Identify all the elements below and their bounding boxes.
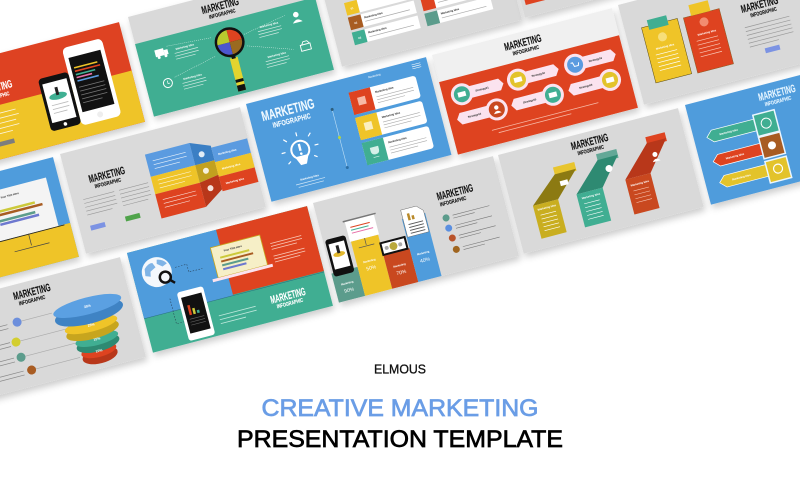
heading: marketing infographic: MARKETING [269,286,307,307]
card: red [681,0,734,73]
step: yellow: Marketing Idea [537,203,557,212]
chart: presentation board [0,176,68,256]
folded table: Marketing Idea [218,147,237,156]
bar: 40 percent [402,213,442,282]
card: red idea: Marketing Idea [375,85,394,94]
list rows: Marketing Idea [368,26,387,34]
heading: marketing infographic: MARKETING [503,33,543,54]
step: teal [568,149,633,227]
folded table: Marketing Idea [225,176,245,185]
chart: stacked funnel [51,289,136,372]
title: creative marketing: CREATIVE MARKETING [262,395,538,422]
icon: document [401,205,429,237]
heading: marketing infographic: INFOGRAPHIC [276,298,304,310]
icon: phone with bars [177,286,215,341]
arrow: red: Marketing Idea [725,152,745,160]
pill: strategy 06 [566,67,623,101]
heading: marketing infographic: MARKETING [570,132,610,153]
heading: marketing infographic [570,132,611,158]
icon: phone [325,235,355,277]
pill: strategy 01 [448,73,506,108]
text: brand name: ELMOUS [374,362,426,376]
step: teal: Marketing Idea [581,191,601,200]
panel: gray slide with red band [499,0,705,18]
panel: gray numbered list slide [316,0,522,67]
panel: blue arrows slide [685,58,800,205]
card: red: Marketing Idea [697,28,717,37]
folded table: Marketing Idea [221,162,241,171]
panel: globe laptop phone slide [127,206,333,353]
icon: laptop with bar chart [205,234,273,282]
card: teal idea: Marketing Idea [388,136,407,144]
pill: strategy 02: Strategy02 [531,71,546,78]
pill: strategy 05 [509,81,566,116]
panel: red strategy pills slide [432,8,638,155]
bar: 50 percent: Marketing [363,257,376,264]
bar: 50 percent: 50% [366,264,378,273]
timeline [330,108,349,169]
list rows: Marketing Idea [364,11,383,19]
chart: stacked funnel: 15% [93,336,102,342]
pill: strategy 01: Strategy01 [475,85,490,93]
icon: large white phone [62,38,122,126]
heading: marketing infographic [0,78,15,105]
text: idea labels: Marketing Idea [267,50,287,59]
icon: globe with magnifier [138,254,175,290]
heading: marketing infographic [269,286,308,311]
list rows: 03 [358,35,362,40]
icon: laptop with bar chart: Your Title Here [223,244,243,253]
arrow: red [710,132,785,171]
step: red [616,132,683,215]
icon: laptop [379,236,409,256]
panel: gray cards slide [618,0,800,105]
button [0,138,15,148]
icon: light bulb [277,128,322,169]
icon: car [299,40,311,51]
legend markers [6,316,37,378]
pill: strategy 06: Strategy06 [579,82,593,90]
bar: 70 percent: Marketing [393,262,406,269]
panel: gray folded table slide [60,107,266,254]
pill: strategy 05: Strategy05 [522,97,537,105]
bar: 40 percent: 40% [420,256,431,265]
chart: stacked funnel: 10% [95,348,104,354]
bar: 40 percent: Marketing [416,249,430,256]
arrow: yellow [717,156,792,195]
bar: 50 percent [351,235,392,296]
pill: strategy 04: Strategy04 [467,111,482,119]
list rows [344,0,493,45]
icon: clock [162,78,173,89]
bar: 90 percent: Marketing [341,279,354,286]
icon: truck [154,47,169,60]
panel: blue bulb slide [246,57,451,202]
heading: marketing infographic: INFOGRAPHIC [750,7,778,19]
legend [442,203,501,254]
text: idea labels: Marketing Idea [259,20,279,29]
step: red: Marketing Idea [630,179,650,188]
pill: strategy 03 [562,44,618,78]
list rows: Marketing Idea [440,7,460,15]
text: idea labels: Marketing Idea [183,72,203,81]
arrow: teal [704,110,780,149]
heading: marketing infographic: MARKETING [260,95,316,124]
bar: 90 percent: 90% [344,286,355,295]
card: yellow idea [355,101,428,140]
card: teal idea [362,126,434,165]
pill: strategy 04 [454,96,510,130]
text: top nav: Marketing [368,72,381,79]
bar: 70 percent [383,248,418,289]
heading: marketing infographic [436,182,476,209]
heading: marketing infographic: INFOGRAPHIC [439,196,467,208]
icon: small black phone [38,72,81,132]
heading: marketing infographic: MARKETING [12,282,52,303]
step: yellow [525,162,591,239]
icon: person [290,11,303,24]
list rows: 02 [354,20,358,25]
arrow: yellow: Marketing Idea [732,173,752,181]
chart: stacked funnel: 35% [83,303,92,309]
folded table [145,129,261,218]
chart: magnifier with pie [211,24,257,94]
panel: gray 3d steps slide [498,108,704,254]
panel: blue and yellow chart slide [0,157,79,304]
text: idea labels: Marketing Idea [175,42,195,51]
card: red idea [348,75,421,115]
arrow: teal: Marketing Idea [719,127,739,136]
panel: gray bars slide [313,156,519,303]
panel: gray funnel slide [0,257,146,404]
heading: marketing infographic: INFOGRAPHIC [94,178,122,190]
bar: 70 percent: 70% [396,269,408,277]
text: idea labels [175,20,287,81]
title: presentation template: PRESENTATION TEMPLATE [237,426,563,453]
heading: marketing infographic: INFOGRAPHIC [18,295,46,307]
card: yellow [640,13,692,83]
heading: marketing infographic: MARKETING [87,165,126,186]
heading: marketing infographic [503,33,544,59]
card: yellow idea: Marketing Idea [381,110,401,119]
heading: marketing infographic [200,0,242,22]
heading: marketing infographic [757,83,798,109]
button [90,222,106,231]
heading: marketing infographic: INFOGRAPHIC [512,45,540,57]
panel: red and yellow phone slide [0,22,145,169]
button [765,45,780,53]
bar: 90 percent [331,267,365,303]
pill: strategy 02 [505,58,561,93]
heading: marketing infographic: INFOGRAPHIC [272,111,312,130]
heading: marketing infographic [87,165,128,191]
heading: marketing infographic: INFOGRAPHIC [577,145,605,157]
pill: strategy 03: Strategy03 [588,56,603,63]
heading: marketing infographic: INFOGRAPHIC [209,8,236,21]
icon: presentation board [343,213,383,250]
heading: marketing infographic [740,0,781,21]
heading: marketing infographic: MARKETING [436,182,474,203]
card: yellow: Marketing Idea [655,42,675,51]
list rows: 01 [350,6,354,11]
chart: stacked funnel: 25% [87,322,96,328]
button [125,213,141,222]
heading: marketing infographic [260,95,318,132]
panel: teal magnifier slide [128,0,334,117]
chart: presentation board: Your Title Here [0,191,20,200]
text: bulb caption: Marketing Idea [300,173,320,182]
heading: marketing infographic [12,282,53,308]
